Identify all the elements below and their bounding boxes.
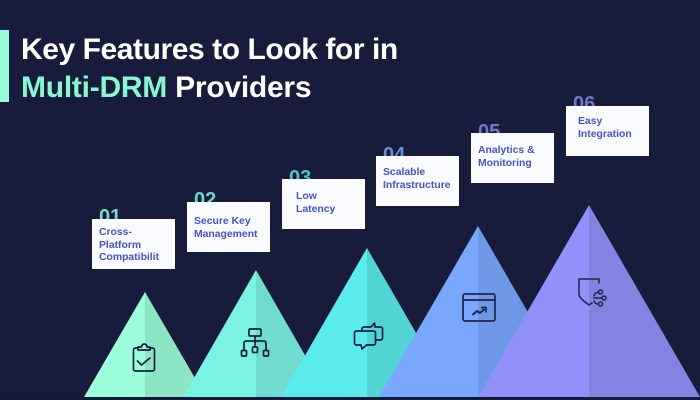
number 06: 06 xyxy=(573,93,595,115)
pyramid 1 xyxy=(84,292,206,397)
card 04 xyxy=(376,156,459,206)
icon: shield network xyxy=(579,279,606,306)
card 04: Scalable xyxy=(383,167,425,178)
icon: chat bubbles xyxy=(354,323,382,349)
icon: clipboard check xyxy=(134,344,154,371)
item 04 xyxy=(376,144,459,206)
item 03 xyxy=(282,167,365,229)
card 04: Infrastructure xyxy=(383,180,451,191)
number 03: 03 xyxy=(289,167,311,189)
accent bar xyxy=(0,30,9,102)
number 01: 01 xyxy=(99,206,121,228)
icon: hierarchy xyxy=(242,329,268,356)
card 01: Platform xyxy=(99,240,141,251)
number 04: 04 xyxy=(383,144,405,166)
pyramid 5 xyxy=(478,205,700,397)
card 03 xyxy=(282,179,365,229)
pyramid 2 xyxy=(183,270,329,397)
card 02: Secure Key xyxy=(194,216,251,227)
card 03: Low xyxy=(296,191,317,202)
card 06: Integration xyxy=(578,129,632,140)
card 03: Latency xyxy=(296,204,335,215)
item 02 xyxy=(187,189,270,252)
card 05: Monitoring xyxy=(478,158,532,169)
card 01 xyxy=(92,219,175,269)
ground strip xyxy=(0,397,700,400)
item 01 xyxy=(92,206,175,269)
card 06: Easy xyxy=(578,116,602,127)
card 05: Analytics & xyxy=(478,145,535,156)
card 02: Management xyxy=(194,229,258,240)
card 06 xyxy=(566,106,649,156)
card 01: Compatibilit xyxy=(99,252,159,263)
title: Key Features to Look for in xyxy=(21,33,398,66)
card 01: Cross- xyxy=(99,227,132,238)
number 05: 05 xyxy=(478,121,500,143)
item 05 xyxy=(471,121,554,183)
pyramid 4 xyxy=(379,226,577,397)
title: Multi-DRM Providers xyxy=(21,71,311,104)
item 06 xyxy=(566,93,649,156)
number 02: 02 xyxy=(194,189,216,211)
icon: analytics window xyxy=(463,294,495,321)
title xyxy=(21,33,398,104)
card 02 xyxy=(187,202,270,252)
pyramid 3 xyxy=(281,248,453,397)
card 05 xyxy=(471,133,554,183)
